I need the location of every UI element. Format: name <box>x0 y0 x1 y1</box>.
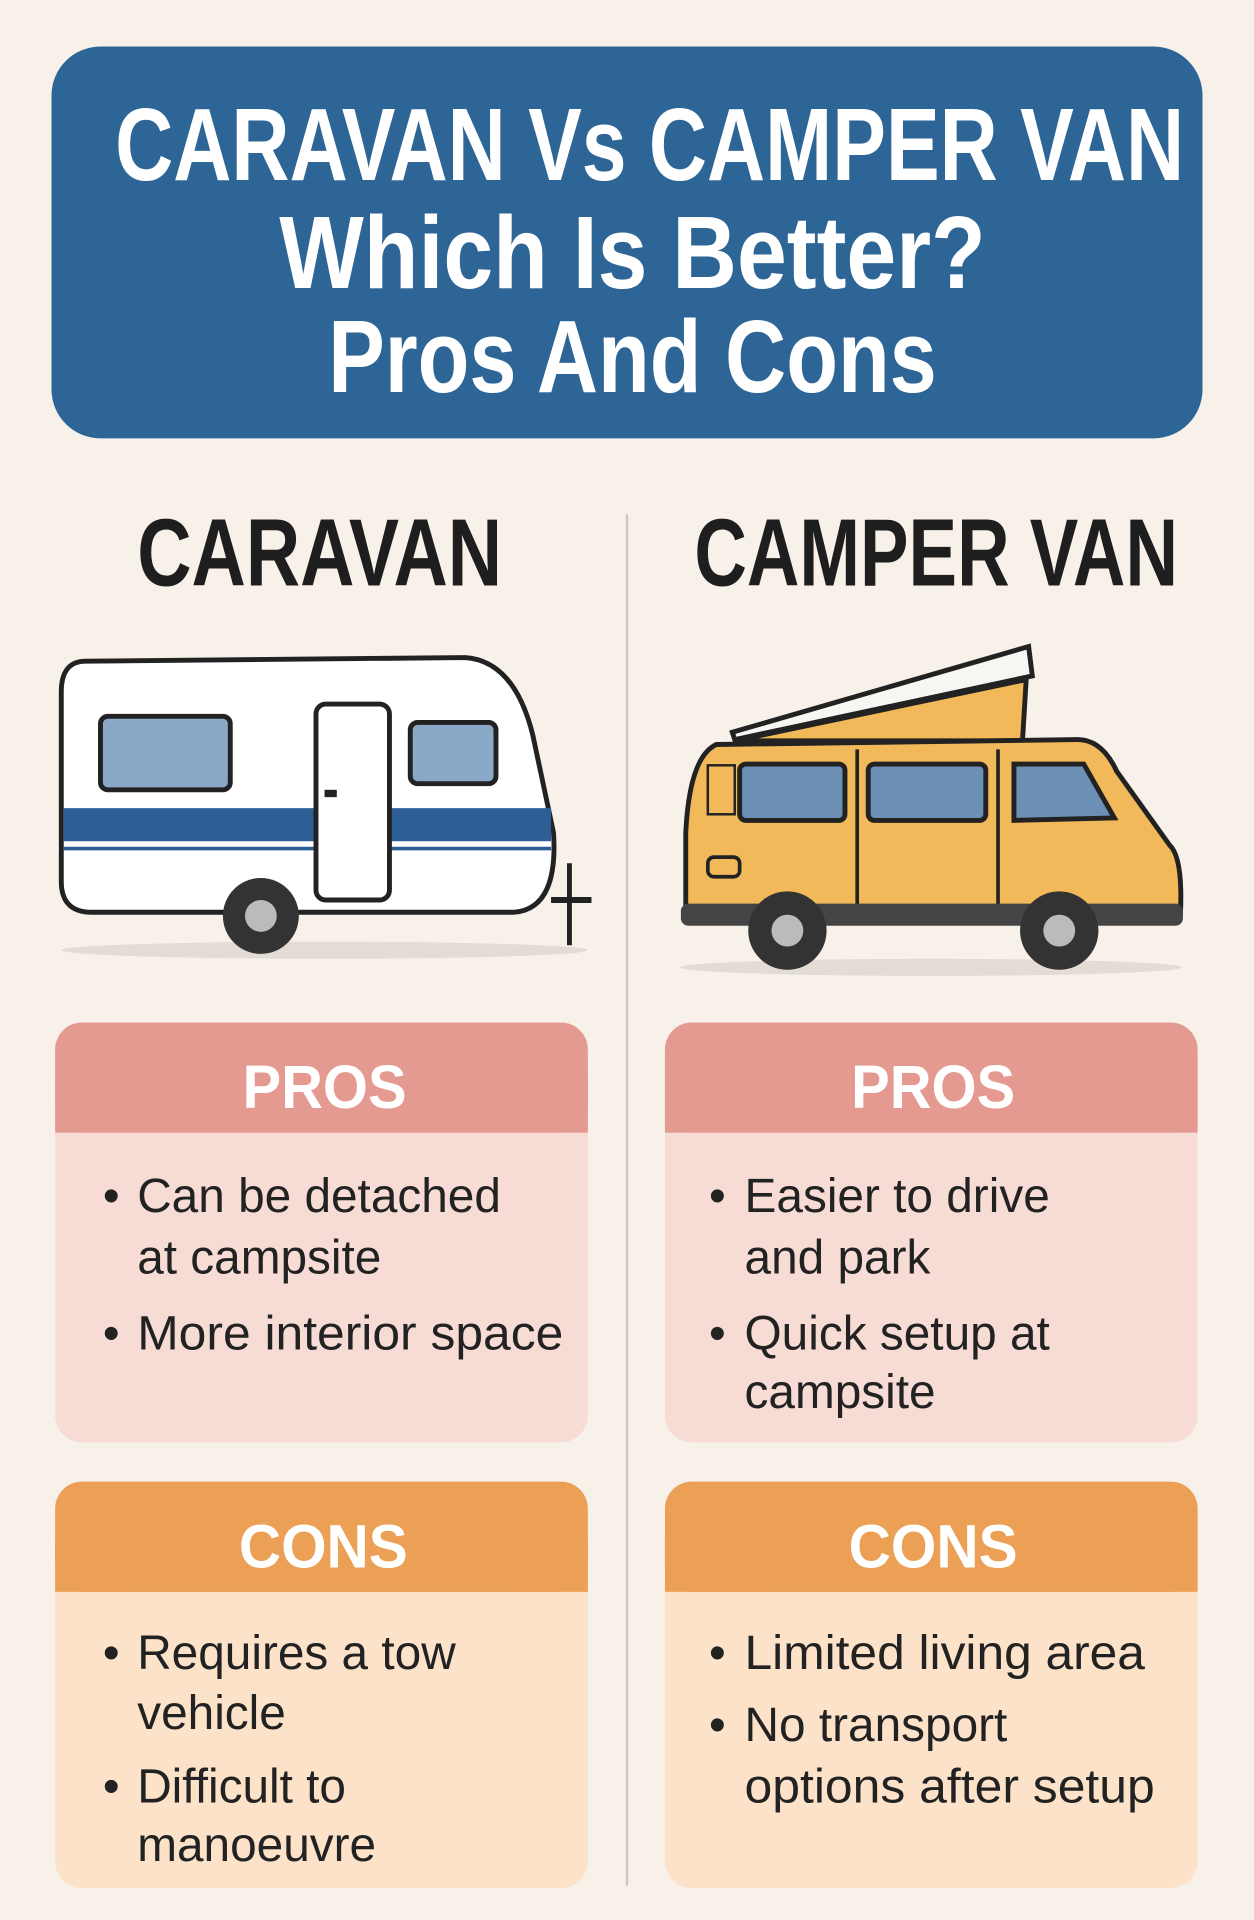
panel: camper van cons: Limited living area <box>745 1627 1145 1680</box>
panel: caravan cons: • <box>103 1760 120 1813</box>
panel: camper van cons <box>665 1482 1198 1888</box>
panel: camper van pros <box>665 1022 1198 1442</box>
title banner <box>51 47 1203 438</box>
title banner: Pros And Cons <box>328 299 937 414</box>
panel: camper van cons: options after setup <box>745 1760 1155 1813</box>
panel: caravan pros: Can be detached <box>137 1170 501 1223</box>
panel: camper van cons: No transport <box>745 1699 1007 1752</box>
panel: camper van pros: PROS <box>851 1053 1015 1121</box>
panel: caravan pros: • <box>103 1170 120 1223</box>
panel: camper van pros: and park <box>745 1231 930 1284</box>
panel: caravan cons: CONS <box>239 1512 408 1580</box>
heading: caravan: CARAVAN <box>137 500 502 606</box>
panel: caravan pros: • <box>103 1307 120 1360</box>
panel: caravan pros <box>55 1022 588 1442</box>
panel: camper van pros: • <box>709 1170 726 1223</box>
panel: camper van cons: CONS <box>849 1512 1018 1580</box>
panel: caravan pros: More interior space <box>137 1307 563 1360</box>
panel: caravan cons: • <box>103 1627 120 1680</box>
panel: camper van pros: Easier to drive <box>745 1170 1050 1223</box>
title banner: Which Is Better? <box>279 195 986 310</box>
panel: caravan cons: Difficult to <box>137 1760 346 1813</box>
panel: caravan pros: at campsite <box>137 1231 381 1284</box>
panel: camper van cons: • <box>709 1627 726 1680</box>
panel: caravan cons <box>55 1482 588 1888</box>
panel: caravan cons: manoeuvre <box>137 1819 376 1872</box>
icon: camper van <box>680 647 1183 976</box>
panel: camper van pros: Quick setup at <box>745 1307 1050 1360</box>
icon: caravan <box>61 658 591 959</box>
panel: caravan cons: Requires a tow <box>137 1627 456 1680</box>
panel: camper van cons: • <box>709 1699 726 1752</box>
panel: caravan pros: PROS <box>243 1053 407 1121</box>
panel: caravan cons: vehicle <box>137 1687 286 1740</box>
panel: camper van pros: • <box>709 1307 726 1360</box>
panel: camper van pros: campsite <box>745 1366 936 1419</box>
